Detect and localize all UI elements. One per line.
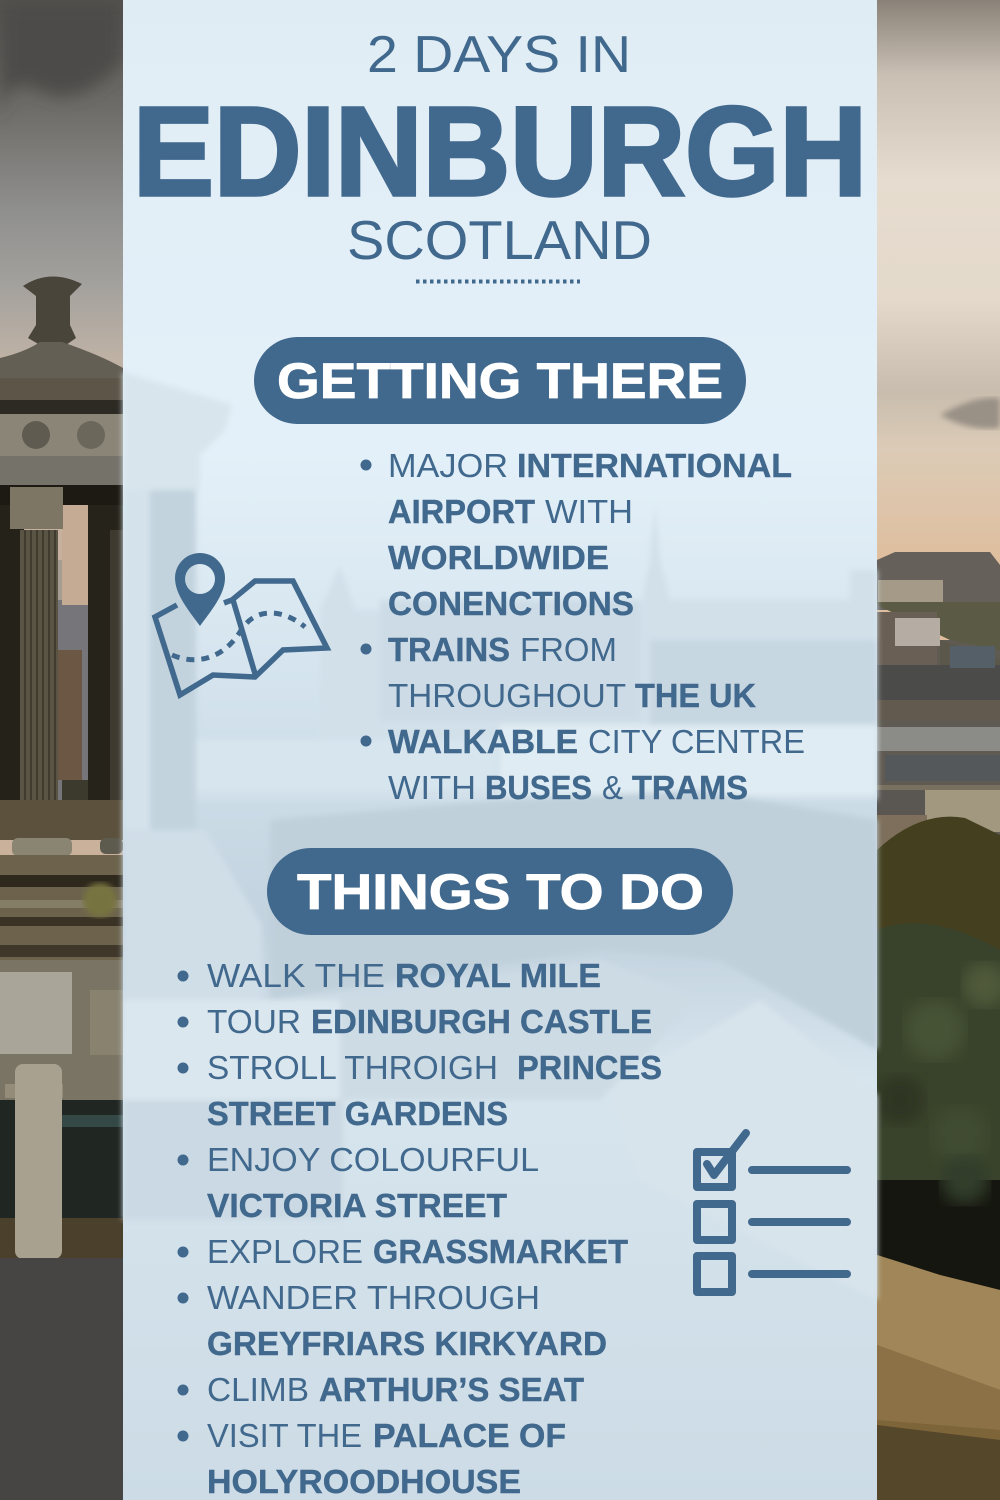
text block: things to do list: PALACE OF bbox=[373, 1417, 566, 1454]
title: SCOTLAND bbox=[347, 209, 652, 271]
text block: getting there list bbox=[360, 447, 805, 806]
text block: getting there list: CITY CENTRE bbox=[588, 723, 805, 760]
text block: getting there list: THE UK bbox=[635, 677, 756, 714]
text block: things to do list: GRASSMARKET bbox=[373, 1233, 628, 1270]
heading pill: getting there: GETTING THERE bbox=[277, 353, 723, 409]
text block: things to do list: VISIT THE bbox=[207, 1417, 362, 1454]
heading pill: things to do bbox=[267, 848, 733, 935]
text block: things to do list: WALK THE bbox=[207, 957, 385, 994]
text block: getting there list: THROUGHOUT bbox=[388, 677, 626, 714]
text block: things to do list: STROLL THROIGH bbox=[207, 1049, 498, 1086]
text block: getting there list: WITH bbox=[545, 493, 633, 530]
text block: things to do list: EDINBURGH CASTLE bbox=[311, 1003, 652, 1040]
central translucent panel with ghosted city bbox=[123, 0, 877, 1500]
text block: getting there list: TRAMS bbox=[632, 769, 748, 806]
text block: getting there list: MAJOR bbox=[388, 447, 508, 484]
title: 2 DAYS IN bbox=[367, 26, 631, 84]
text block: getting there list: INTERNATIONAL bbox=[517, 447, 792, 484]
text block: things to do list: HOLYROODHOUSE bbox=[207, 1463, 521, 1500]
heading pill: getting there bbox=[254, 337, 746, 424]
text block: things to do list: VICTORIA STREET bbox=[207, 1187, 507, 1224]
title: EDINBURGH bbox=[133, 81, 867, 222]
text block: things to do list: ENJOY COLOURFUL bbox=[207, 1141, 539, 1178]
text block: getting there list: TRAINS bbox=[388, 631, 510, 668]
icon: map with location pin bbox=[155, 553, 327, 695]
text block: getting there list: FROM bbox=[520, 631, 617, 668]
text block: getting there list: AIRPORT bbox=[388, 493, 535, 530]
text block: getting there list: WALKABLE bbox=[388, 723, 578, 760]
text block: things to do list: ROYAL MILE bbox=[395, 957, 601, 994]
text block: things to do list: TOUR bbox=[207, 1003, 301, 1040]
icon: checklist bbox=[697, 1133, 847, 1292]
background photo left: Dugald Stewart monument bbox=[0, 0, 123, 1500]
text block: things to do list: PRINCES bbox=[517, 1049, 662, 1086]
text block: things to do list: EXPLORE bbox=[207, 1233, 363, 1270]
text block: things to do list: GREYFRIARS KIRKYARD bbox=[207, 1325, 607, 1362]
text block: getting there list: WORLDWIDE bbox=[388, 539, 609, 576]
text block: getting there list: BUSES bbox=[485, 769, 592, 806]
text block: things to do list: WANDER THROUGH bbox=[207, 1279, 540, 1316]
title bbox=[133, 26, 867, 282]
text block: getting there list: & bbox=[602, 769, 623, 806]
text block: things to do list: ARTHUR’S SEAT bbox=[319, 1371, 584, 1408]
text block: things to do list: CLIMB bbox=[207, 1371, 309, 1408]
text block: getting there list: CONENCTIONS bbox=[388, 585, 634, 622]
text block: things to do list: STREET GARDENS bbox=[207, 1095, 508, 1132]
text block: getting there list: WITH bbox=[388, 769, 476, 806]
heading pill: things to do: THINGS TO DO bbox=[297, 864, 704, 920]
text block: things to do list bbox=[178, 957, 662, 1500]
background photo right: castle, rooftops, trees and grass bbox=[875, 0, 1000, 1500]
